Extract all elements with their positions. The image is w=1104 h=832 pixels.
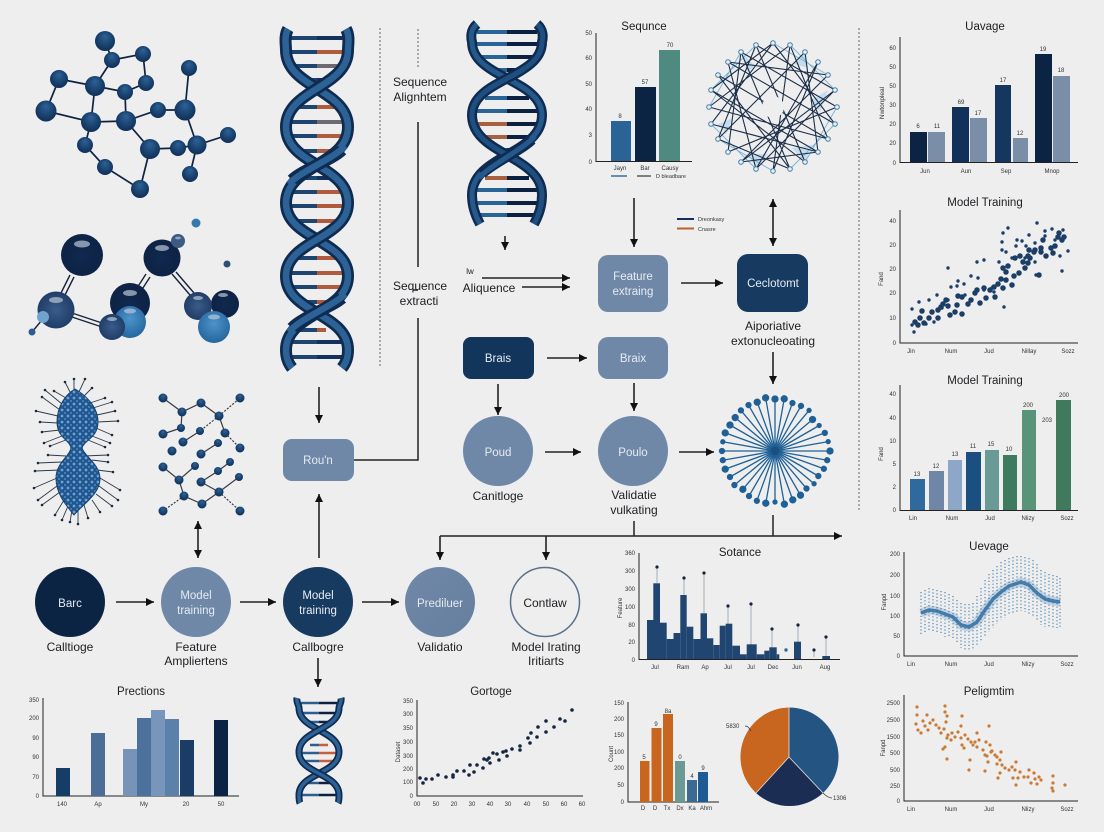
chart: uavage bars: 19 [1040, 47, 1047, 53]
chart: prections bars: 0 [36, 794, 40, 800]
chart: model training bars: 13 [914, 472, 921, 478]
label: model irating: Model Irating [511, 640, 581, 654]
chart: uavage bars: 6 [916, 124, 920, 130]
chart: gortoge scatter: 60 [579, 802, 586, 808]
label: aiporiative [731, 319, 815, 348]
chart: model training scatter: Sozz [1061, 349, 1075, 355]
arrow: dark node to prediluer [362, 601, 399, 603]
chart: uevage dotted wave: 100 [890, 614, 901, 620]
label: sequence extract: extracti [400, 294, 438, 308]
chart: peligmtim scatter: 250 [890, 784, 901, 790]
chart: sotance bars with whiskers: Sotance [719, 547, 761, 559]
chart: gortoge scatter [396, 686, 586, 808]
legend: line key [677, 217, 725, 233]
chart: gortoge scatter: 30 [505, 802, 512, 808]
chart: sequence bars: Causy [661, 166, 679, 172]
label: calltioge: Calltioge [47, 640, 94, 654]
chart: model training scatter: 10 [889, 316, 897, 322]
box: braix: Braix [620, 353, 646, 365]
chart: gortoge scatter: 300 [403, 740, 414, 746]
chart: model training bars: 200 [1023, 403, 1034, 409]
chart: prections bars: Prections [117, 686, 165, 698]
chart: orange bars: 150 [614, 701, 625, 707]
chart: sequence bars [585, 21, 692, 180]
chart: sotance bars with whiskers: 360 [625, 551, 636, 557]
chart: uavage bars: 30 [889, 103, 897, 109]
chart: model training bars: 11 [970, 444, 977, 450]
node: model training dark [283, 567, 353, 637]
chart: model training bars: Sozz [1060, 516, 1074, 522]
chart: sequence bars: 70 [667, 43, 674, 49]
chart: sotance bars with whiskers: Ap [701, 665, 709, 671]
chart: model training bars: 203 [1042, 418, 1053, 424]
label: sequence alignment: Sequence [393, 75, 447, 89]
label: sequence extract: Sequence [393, 279, 447, 293]
chart: prections bars: 90 [32, 736, 40, 742]
chart: sequence bars: 50 [585, 31, 593, 37]
chart: peligmtim scatter: Lin [907, 807, 915, 813]
chart: sequence bars: 50 [585, 82, 593, 88]
chart: uavage bars [879, 21, 1078, 175]
arrow: lattice double [197, 521, 199, 558]
node: pout: Poud [485, 447, 511, 459]
node: prediluer [405, 567, 475, 637]
box: ceclotomt: Ceclotomt [747, 278, 800, 290]
node: poulo: Poulo [618, 447, 648, 459]
chart: orange bars: D [653, 806, 658, 812]
chart: sequence bars: 0 [589, 160, 593, 166]
arrow: bar chart to feature box [633, 198, 635, 247]
node: poulo [598, 416, 668, 486]
node: barc: Barc [58, 598, 82, 610]
chart: model training bars: 10 [889, 439, 897, 445]
chart: gortoge scatter: 20 [451, 802, 458, 808]
chart: peligmtim scatter: 1500 [887, 735, 901, 741]
chart: model training bars: 40 [889, 392, 897, 398]
chart: model training scatter: Jin [907, 349, 915, 355]
chart: gortoge scatter: Gortoge [470, 686, 512, 698]
node: model training light: Model [180, 590, 212, 602]
chart: sotance bars with whiskers: Feature [618, 597, 624, 618]
chart: model training bars: Jud [985, 516, 995, 522]
arrow: pout to poulo [545, 451, 581, 453]
chart: uavage bars: 12 [1017, 131, 1024, 137]
chart: peligmtim scatter: 500 [890, 751, 901, 757]
legend: line key: Dreonkasy [698, 217, 725, 223]
label: aliquence: lw [466, 267, 474, 276]
icon: radial spoke burst [720, 394, 833, 508]
chart: orange bars: Ka [688, 806, 696, 812]
label: validatie [610, 488, 658, 517]
arrow: lower aliquence [522, 286, 570, 288]
node: barc [35, 567, 105, 637]
chart: uevage dotted wave: Num [945, 662, 957, 668]
label: model irating [511, 640, 581, 668]
chart: gortoge scatter: 300 [403, 754, 414, 760]
chart: model training bars: 0 [893, 508, 897, 514]
arrow: poulo to burst [679, 451, 714, 453]
chart: sequence bars: Bar [640, 166, 650, 172]
chart: sequence bars: Sequnce [621, 21, 667, 33]
chart: model training bars: 15 [988, 442, 995, 448]
chart: uavage bars: 60 [889, 46, 897, 52]
icon: large DNA helix [286, 29, 348, 368]
chart: uavage bars: 11 [934, 124, 941, 130]
chart: model training bars: Lin [909, 516, 917, 522]
chart: peligmtim scatter: 2500 [887, 701, 901, 707]
chart: uavage bars: 17 [1000, 78, 1007, 84]
arrow: brais to pout [497, 384, 499, 415]
chart: prections bars: 20 [183, 802, 190, 808]
chart: peligmtim scatter: Peligmtim [964, 686, 1014, 698]
chart: uevage dotted wave: 100 [890, 594, 901, 600]
chart: prections bars: My [140, 802, 148, 808]
chart: model training bars: 200 [1059, 393, 1070, 399]
chart: prections bars: 50 [218, 802, 225, 808]
label: aiporiative: extonucleoating [731, 334, 815, 348]
node: model training dark: training [299, 605, 337, 617]
chart: orange bars: 9 [654, 722, 658, 728]
chart: sotance bars with whiskers: Ram [677, 665, 689, 671]
arrow: dark node to small helix [317, 658, 319, 687]
chart: peligmtim scatter: 500 [890, 768, 901, 774]
box: route [283, 439, 354, 481]
connector: distribution bus [440, 515, 842, 560]
chart: gortoge scatter: 300 [403, 712, 414, 718]
box: brais [463, 337, 534, 379]
chart: sequence bars: 40 [585, 107, 593, 113]
chart: model training bars: 12 [933, 464, 940, 470]
chart: sotance bars with whiskers: Jul [724, 665, 732, 671]
chart: uavage bars: 18 [1058, 68, 1065, 74]
label: aliquence: Aliquence [463, 281, 516, 295]
chart: uavage bars: 0 [893, 161, 897, 167]
chart: peligmtim scatter: Num [945, 807, 957, 813]
chart: sequence bars: 8 [618, 114, 622, 120]
chart: uavage bars: 20 [889, 122, 897, 128]
chart: model training scatter: 20 [889, 267, 897, 273]
chart: uevage dotted wave: Sozz [1060, 662, 1074, 668]
arrow: feature to dark box [681, 282, 723, 284]
chart: orange bars: 100 [614, 750, 625, 756]
chart: model training bars: Nlizy [1022, 516, 1034, 522]
icon: cell cluster with filaments [34, 379, 120, 524]
chart: gortoge scatter: 50 [543, 802, 550, 808]
chart: orange bars: 5 [642, 755, 646, 761]
chart: prections bars: 350 [29, 698, 40, 704]
chart: prections bars: Ap [94, 802, 102, 808]
chart: uavage bars: Uavage [965, 21, 1005, 33]
box: feature extraing: extraing [613, 286, 653, 298]
chart: sotance bars with whiskers: Dec [768, 665, 778, 671]
chart: prections bars: 70 [32, 775, 40, 781]
box: brais: Brais [485, 353, 511, 365]
arrow: barc to model training [116, 601, 154, 603]
chart: uevage dotted wave: Lin [907, 662, 915, 668]
chart: sequence bars: 60 [585, 56, 593, 62]
chart: model training scatter: 40 [889, 219, 897, 225]
chart: uevage dotted wave [882, 541, 1078, 668]
chart: uavage bars: Jun [920, 169, 930, 175]
chart: gortoge scatter: 00 [414, 802, 421, 808]
chart: model training bars: 5 [893, 462, 897, 468]
chart: uavage bars: 50 [889, 65, 897, 71]
label: feature amplierters: Feature [175, 640, 217, 654]
chart: sotance bars with whiskers: 300 [625, 569, 636, 575]
node: pout [463, 416, 533, 486]
chart: gortoge scatter: 0 [410, 794, 414, 800]
icon: branched molecule lattice [158, 394, 244, 516]
arrow: upper aliquence [482, 277, 570, 279]
chart: model training bars: 10 [1006, 447, 1013, 453]
box: braix [598, 337, 668, 379]
chart: model training bars: Num [946, 516, 958, 522]
chart: gortoge scatter: 30 [469, 802, 476, 808]
chart: peligmtim scatter: Jud [984, 807, 994, 813]
chart: uevage dotted wave: Uevage [969, 541, 1009, 553]
legend: line key: Cnasre [698, 227, 716, 233]
chart: orange bars [609, 701, 719, 812]
chart: sequence bars: 3 [589, 133, 593, 139]
chart: model training bars: 2 [893, 485, 897, 491]
label: feature amplierters: Ampliertens [164, 654, 228, 668]
chart: uavage bars: 50 [889, 84, 897, 90]
box: feature extraing [598, 255, 668, 312]
chart: orange bars: 150 [614, 733, 625, 739]
box: ceclotomt [737, 254, 808, 312]
chart: model training scatter: Jud [984, 349, 994, 355]
label: sequence alignment: Alignhtem [393, 90, 447, 104]
chart: sotance bars with whiskers: 20 [628, 640, 636, 646]
chart: orange bars: 50 [617, 783, 625, 789]
chart: sotance bars with whiskers [618, 547, 840, 671]
label: aliquence [463, 267, 516, 295]
chart: orange bars: Dx [676, 806, 684, 812]
chart: peligmtim scatter: Fanpd [881, 739, 887, 757]
chart: pie: 5830 [726, 724, 740, 730]
chart: model training scatter [879, 197, 1078, 355]
chart: model training bars [879, 375, 1078, 522]
arrow: helix to aliquence [504, 236, 506, 250]
chart: sotance bars with whiskers: Jun [792, 665, 802, 671]
chart: model training scatter: Nillay [1022, 349, 1036, 355]
chart: uevage dotted wave: 200 [890, 552, 901, 558]
icon: small DNA helix [297, 698, 341, 803]
chart: prections bars: 200 [29, 716, 40, 722]
chart: orange bars: 4 [690, 774, 694, 780]
chart: uavage bars: Nwtonpleal [879, 86, 886, 119]
chart: model training scatter: 0 [893, 341, 897, 347]
chart: sequence bars: 57 [642, 80, 649, 86]
icon: ball and stick molecule [28, 218, 239, 343]
arrow: model training to route [318, 494, 320, 558]
icon: circular network [707, 41, 839, 173]
chart: orange bars: 8a [665, 709, 672, 715]
chart: uavage bars: Aun [961, 169, 971, 175]
chart: sotance bars with whiskers: 300 [625, 587, 636, 593]
chart: orange bars: 9 [701, 766, 705, 772]
chart: pie: 1306 [833, 796, 847, 802]
label: validatie: vulkating [610, 503, 658, 517]
connector: sequence line [354, 122, 418, 460]
icon: molecule network [36, 31, 236, 198]
arrow: helix to route [318, 387, 320, 423]
chart: model training scatter: Fand [879, 272, 885, 286]
chart: uevage dotted wave: Fanpd [882, 593, 888, 611]
arrow: dark box to burst [772, 352, 774, 384]
node: contlaw [510, 568, 580, 636]
chart: gortoge scatter: 200 [403, 767, 414, 773]
chart: orange bars: Ahm [700, 806, 712, 812]
node: model training light [161, 567, 231, 637]
chart: model training scatter: 20 [889, 243, 897, 249]
chart: gortoge scatter: 350 [403, 699, 414, 705]
chart: orange bars: 200 [614, 766, 625, 772]
chart: sotance bars with whiskers: Aug [820, 665, 830, 671]
chart: uavage bars: Mnop [1044, 169, 1060, 175]
chart: uevage dotted wave: 50 [893, 634, 901, 640]
label: model irating: Iritiarts [528, 654, 564, 668]
label: aiporiative: Aiporiative [745, 319, 801, 333]
chart: peligmtim scatter: Nlizy [1022, 807, 1034, 813]
arrow: network to box double [772, 199, 774, 246]
chart: model training scatter: 20 [889, 291, 897, 297]
chart: model training bars: Fand [879, 447, 885, 461]
chart: model training bars: Model Training [947, 375, 1023, 387]
chart: uavage bars: 17 [975, 111, 982, 117]
chart: gortoge scatter: 60 [561, 802, 568, 808]
node: contlaw: Contlaw [523, 596, 567, 610]
box: feature extraing: Feature [613, 271, 653, 283]
chart: gortoge scatter: 350 [403, 726, 414, 732]
chart: gortoge scatter: 100 [403, 780, 414, 786]
chart: model training bars: 13 [952, 452, 959, 458]
chart: sequence bars: D bleadbare [656, 174, 686, 180]
chart: uavage bars: 20 [889, 141, 897, 147]
chart: gortoge scatter: Dataset [396, 741, 402, 762]
chart: model training bars: 40 [889, 416, 897, 422]
chart: peligmtim scatter: 2500 [887, 718, 901, 724]
chart: orange bars: 0 [621, 800, 625, 806]
chart: uavage bars: 69 [958, 100, 965, 106]
chart: uevage dotted wave: Jud [984, 662, 994, 668]
chart: uevage dotted wave: 0 [897, 654, 901, 660]
node: model training light: training [177, 605, 215, 617]
chart: sotance bars with whiskers: 100 [625, 605, 636, 611]
chart: sotance bars with whiskers: Jul [747, 665, 755, 671]
chart: orange bars: Tx [664, 806, 670, 812]
arrow: brais to braix [547, 357, 587, 359]
chart: uevage dotted wave: Nlizy [1022, 662, 1034, 668]
label: cantilogs: Canitloge [473, 489, 524, 503]
icon: upper DNA helix [471, 24, 543, 224]
chart: sotance bars with whiskers: 0 [632, 658, 636, 664]
chart: orange bars: 200 [614, 717, 625, 723]
box: route: Rou'n [303, 455, 333, 467]
label: sequence extract [393, 279, 447, 308]
label: callbogre: Callbogre [292, 640, 344, 654]
chart: prections bars: 90 [32, 755, 40, 761]
chart: uavage bars: Sep [1001, 169, 1012, 175]
label: sequence alignment [393, 75, 447, 104]
chart: uevage dotted wave: 200 [890, 573, 901, 579]
chart: prections bars [29, 686, 239, 808]
chart: sotance bars with whiskers: 80 [628, 623, 636, 629]
chart: model training scatter: Model Training [947, 197, 1023, 209]
chart: gortoge scatter: 40 [524, 802, 531, 808]
chart: gortoge scatter: 40 [487, 802, 494, 808]
arrow: braix to poulo [633, 383, 635, 411]
node: prediluer: Prediluer [417, 598, 463, 610]
chart: pie [726, 708, 847, 806]
label: validatie: Validatie [611, 488, 657, 502]
chart: peligmtim scatter: Sozz [1060, 807, 1074, 813]
chart: peligmtim scatter [881, 686, 1078, 813]
chart: orange bars: 0 [678, 755, 682, 761]
chart: model training scatter: Num [945, 349, 957, 355]
chart: orange bars: D [641, 806, 646, 812]
label: feature amplierters [164, 640, 228, 668]
chart: gortoge scatter: 50 [433, 802, 440, 808]
chart: orange bars: Count [609, 746, 615, 762]
node: model training dark: Model [302, 590, 334, 602]
chart: peligmtim scatter: 0 [897, 799, 901, 805]
arrow: model training to dark node [240, 601, 276, 603]
label: validatio: Validatio [417, 640, 463, 654]
chart: sequence bars: Jayn [614, 166, 626, 172]
chart: prections bars: 140 [57, 802, 68, 808]
chart: sotance bars with whiskers: Jul [651, 665, 659, 671]
